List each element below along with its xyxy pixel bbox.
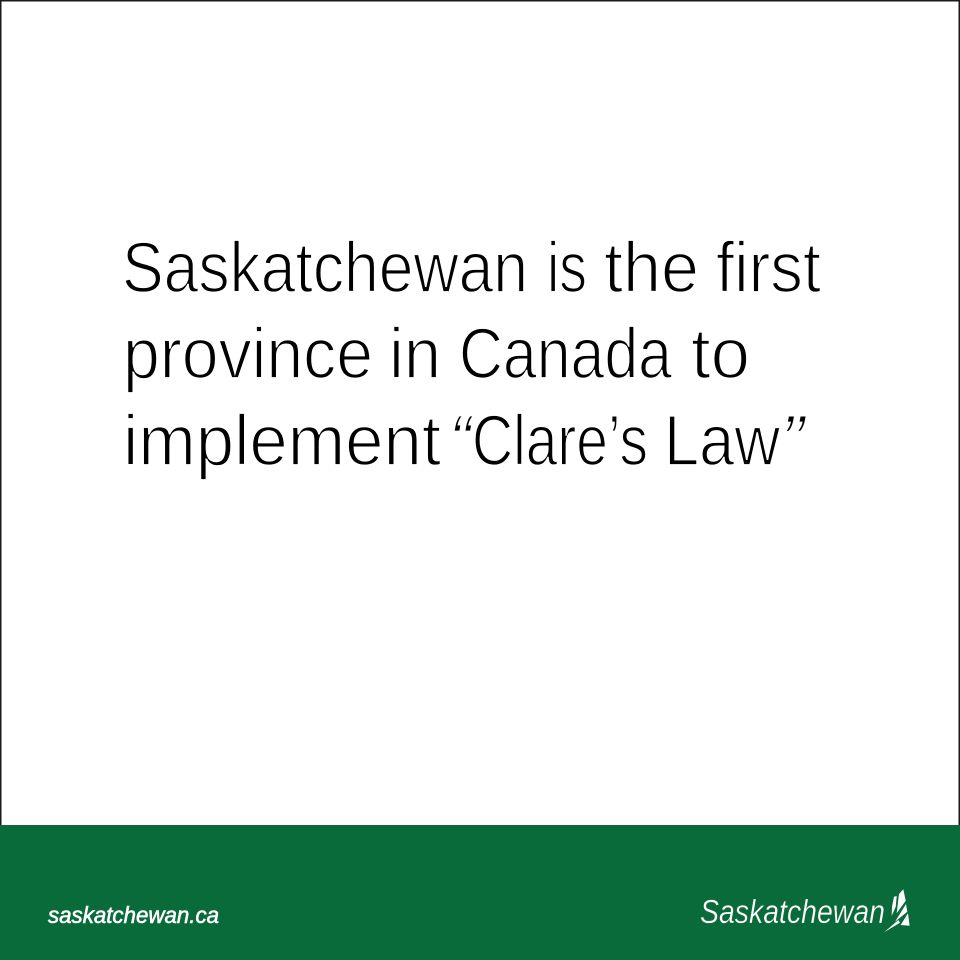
heading: headline statement: implement xyxy=(123,402,441,481)
text: Saskatchewan wordmark: Saskatchewan xyxy=(700,893,885,930)
heading: headline statement: ” xyxy=(780,402,807,481)
heading: headline statement: is xyxy=(547,229,587,308)
logo: Saskatchewan wordmark with wheat icon xyxy=(700,889,910,932)
heading: headline statement: first xyxy=(716,229,821,308)
heading: headline statement: Canada xyxy=(459,315,672,394)
icon: wheat sheaf xyxy=(884,889,910,932)
panel: green footer band xyxy=(0,825,960,960)
heading: headline statement: Saskatchewan xyxy=(122,229,528,308)
heading: headline statement: Law xyxy=(664,402,781,481)
heading: headline statement: in xyxy=(389,315,441,394)
heading: headline statement xyxy=(122,229,821,481)
heading: headline statement: the xyxy=(604,229,699,308)
heading: headline statement: province xyxy=(123,315,373,394)
heading: headline statement: “ xyxy=(449,402,474,481)
heading: headline statement: to xyxy=(691,315,750,394)
text: website address: saskatchewan.ca xyxy=(48,902,219,928)
heading: headline statement: Clare’s xyxy=(472,402,648,481)
